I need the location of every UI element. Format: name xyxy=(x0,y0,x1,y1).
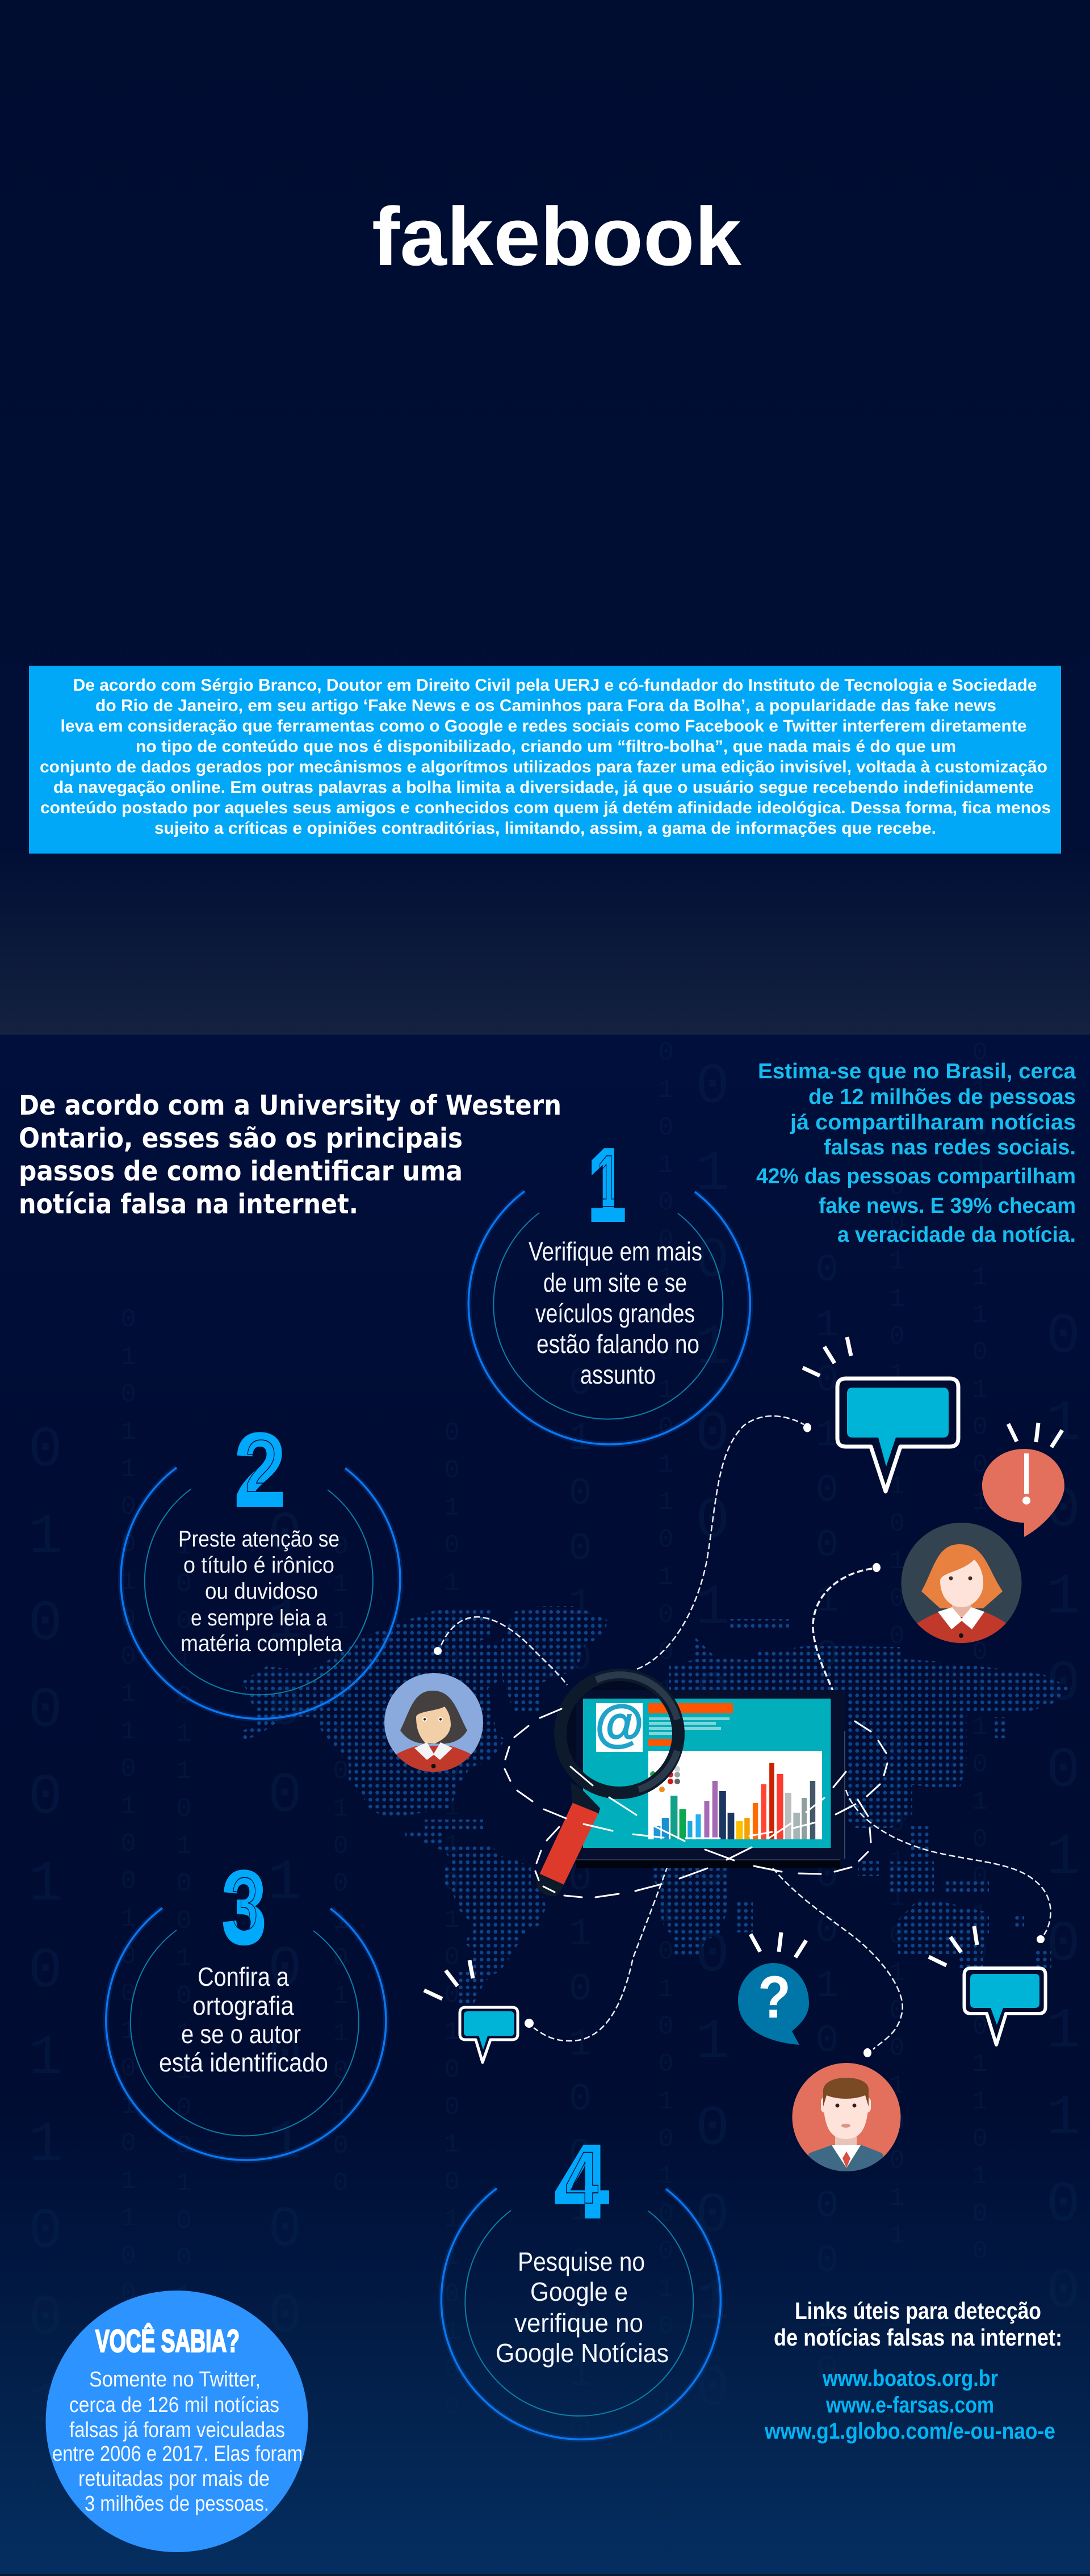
panel: intro text banner: De acordo com Sérgio Branco, Doutor em Direito Civil pela UERJ e có-fundador do Instituto de Tecnologia e Sociedade xyxy=(73,676,1037,695)
step 2: o título é irônico xyxy=(183,1553,334,1578)
callout: Brazil statistics: 42% das pessoas compartilham xyxy=(756,1165,1076,1188)
panel: intro text banner: conteúdo postado por aqueles seus amigos e conhecidos com quem já detém afinidade ideológica. Dessa forma, fica menos xyxy=(40,799,1051,817)
step 2: 2 xyxy=(235,1413,285,1527)
step 4: 4 xyxy=(565,2136,598,2219)
panel: você sabia: Somente no Twitter, xyxy=(89,2368,261,2392)
at-sign tile: @ xyxy=(595,1695,644,1752)
article text bars xyxy=(648,1703,733,1746)
heading: University of Western Ontario xyxy=(19,1090,561,1220)
background binary digit columns: 011001010010110100 xyxy=(326,1532,355,2207)
callout: Brazil statistics: de 12 milhões de pessoas xyxy=(808,1085,1076,1109)
background binary digit columns: 001011001011010010010110100 xyxy=(437,1419,467,2430)
background binary digit columns: 010100110100101001101001010110100 xyxy=(965,1039,995,2275)
dashed connector curves xyxy=(434,1416,1051,2057)
background binary digit columns: 010100100101101001010011010010100101101001 xyxy=(652,1039,680,2576)
callout: Brazil statistics: fake news. E 39% checam xyxy=(819,1194,1076,1218)
panel: useful links: Links úteis para detecção xyxy=(795,2297,1041,2324)
step 4: verifique no xyxy=(514,2308,643,2338)
background binary digit columns: 0101100100110100100101011001 xyxy=(114,1305,143,2354)
panel: intro text banner xyxy=(29,666,1061,854)
background binary digit columns: 01001011001010010010 xyxy=(559,1362,602,2463)
icon: exclamation bubble xyxy=(982,1423,1064,1537)
panel: intro text banner: leva em consideração que ferramentas como o Google e redes sociais como Facebook e Twitter interferem diretamente xyxy=(60,717,1026,736)
panel: useful links: www.boatos.org.br xyxy=(822,2366,998,2391)
panel: você sabia xyxy=(45,2291,308,2552)
world map dots xyxy=(243,1606,1072,2003)
panel: você sabia: 3 milhões de pessoas. xyxy=(85,2492,269,2516)
step 4: Google Notícias xyxy=(496,2338,669,2368)
panel: intro text banner: no tipo de conteúdo que nos é disponibilizado, criando um “filtro-bolha”, que nada mais é do que um xyxy=(136,737,956,756)
step 4 xyxy=(441,2125,720,2439)
background binary digit columns: 010100101010010010010 xyxy=(805,1249,849,2405)
panel: useful links xyxy=(764,2297,1062,2444)
step 1 xyxy=(468,1128,750,1444)
step 1: veículos grandes xyxy=(535,1298,695,1328)
avatar: man xyxy=(793,2063,900,2174)
heading: University of Western Ontario: notícia falsa na internet. xyxy=(19,1188,358,1220)
step 4: 4 xyxy=(555,2125,608,2239)
step 3: 3 xyxy=(232,1862,258,1945)
panel: você sabia: VOCÊ SABIA? xyxy=(95,2323,240,2359)
bar chart xyxy=(648,1751,822,1839)
step 1: Verifique em mais xyxy=(529,1237,702,1266)
step 2: Preste atenção se xyxy=(178,1527,339,1552)
panel: intro text banner: sujeito a críticas e opiniões contraditórias, limitando, assim, a gama de informações que recebe. xyxy=(154,819,936,838)
panel: useful links: www.g1.globo.com/e-ou-nao-e xyxy=(764,2419,1055,2444)
icon: question bubble: ? xyxy=(758,1964,791,2031)
panel: intro text banner: da navegação online. Em outras palavras a bolha limita a diversidade, já que o usuário segue recebendo indefinidamente xyxy=(53,778,1034,797)
panel: você sabia: falsas já foram veiculadas xyxy=(69,2418,285,2442)
avatar: woman with dark hair xyxy=(384,1673,483,1774)
icon: tablet with magnifier xyxy=(536,1675,845,1896)
step 1: de um site e se xyxy=(543,1268,687,1297)
panel: intro text banner: conjunto de dados gerados por mecânismos e algorítmos utilizados para fazer uma edição invisível, voltada à customização xyxy=(40,758,1047,776)
callout: Brazil statistics: Estima-se que no Brasil, cerca xyxy=(758,1060,1076,1083)
background binary digit columns: 0101001010010010 xyxy=(680,1056,745,2445)
icon: large speech bubble xyxy=(803,1337,958,1491)
step 2: matéria completa xyxy=(181,1631,343,1656)
callout: Brazil statistics: já compartilharam notícias xyxy=(790,1111,1076,1134)
panel: você sabia: cerca de 126 mil notícias xyxy=(69,2393,279,2417)
panel: você sabia: retuitadas por mais de xyxy=(78,2467,270,2491)
step 1: estão falando no xyxy=(536,1329,699,1359)
callout: Brazil statistics xyxy=(756,1060,1076,1247)
icon: small speech bubble xyxy=(424,1960,518,2062)
step 3: Confira a xyxy=(198,1962,289,1991)
step 1: 1 xyxy=(588,1128,626,1242)
step 3: está identificado xyxy=(159,2048,328,2077)
background: top section xyxy=(0,0,1090,1035)
panel: você sabia: entre 2006 e 2017. Elas foram xyxy=(52,2442,303,2466)
background binary digit columns: 010010010010 xyxy=(253,1504,317,2546)
heading: University of Western Ontario: De acordo com a University of Western xyxy=(19,1090,561,1121)
heading: University of Western Ontario: Ontario, esses são os principais xyxy=(19,1123,463,1154)
background binary digit columns: 0100010110010 xyxy=(14,1419,77,2548)
panel: intro text banner: do Rio de Janeiro, em seu artigo ‘Fake News e os Caminhos para Fora da Bolha’, a popularidade das fake news xyxy=(95,696,996,715)
step 4: Pesquise no xyxy=(518,2247,645,2276)
step 4: Google e xyxy=(530,2277,628,2306)
callout: Brazil statistics: falsas nas redes sociais. xyxy=(824,1136,1076,1159)
icon: right speech bubble xyxy=(929,1926,1046,2045)
step 1: assunto xyxy=(580,1360,656,1389)
tablet frame xyxy=(576,1690,845,1868)
step 3: ortografia xyxy=(192,1991,294,2020)
background binary digit columns xyxy=(14,1039,1090,2576)
step 2: e sempre leia a xyxy=(191,1606,328,1631)
step 2 xyxy=(121,1413,400,1719)
magnifying glass xyxy=(536,1675,678,1896)
panel: useful links: www.e-farsas.com xyxy=(825,2393,994,2418)
step 3 xyxy=(106,1851,386,2160)
title: fakebook xyxy=(372,190,742,283)
step 3: e se o autor xyxy=(181,2019,301,2049)
icon: question bubble xyxy=(738,1932,809,2045)
step 2: ou duvidoso xyxy=(205,1579,318,1604)
background binary digit columns: 100101101001011001001 xyxy=(169,1532,199,2319)
step 3: 3 xyxy=(223,1851,266,1965)
heading: University of Western Ontario: passos de como identificar uma xyxy=(19,1155,463,1187)
dashed orbit around tablet xyxy=(505,1709,887,1897)
avatar: woman with orange hair xyxy=(902,1523,1022,1646)
background: bottom section xyxy=(0,1035,1090,2576)
step 1: 1 xyxy=(597,1140,619,1222)
step 2: 2 xyxy=(245,1424,277,1507)
callout: Brazil statistics: a veracidade da notícia. xyxy=(837,1223,1076,1247)
background binary digit columns: 100110100101001001011010010011 xyxy=(882,1135,912,2259)
